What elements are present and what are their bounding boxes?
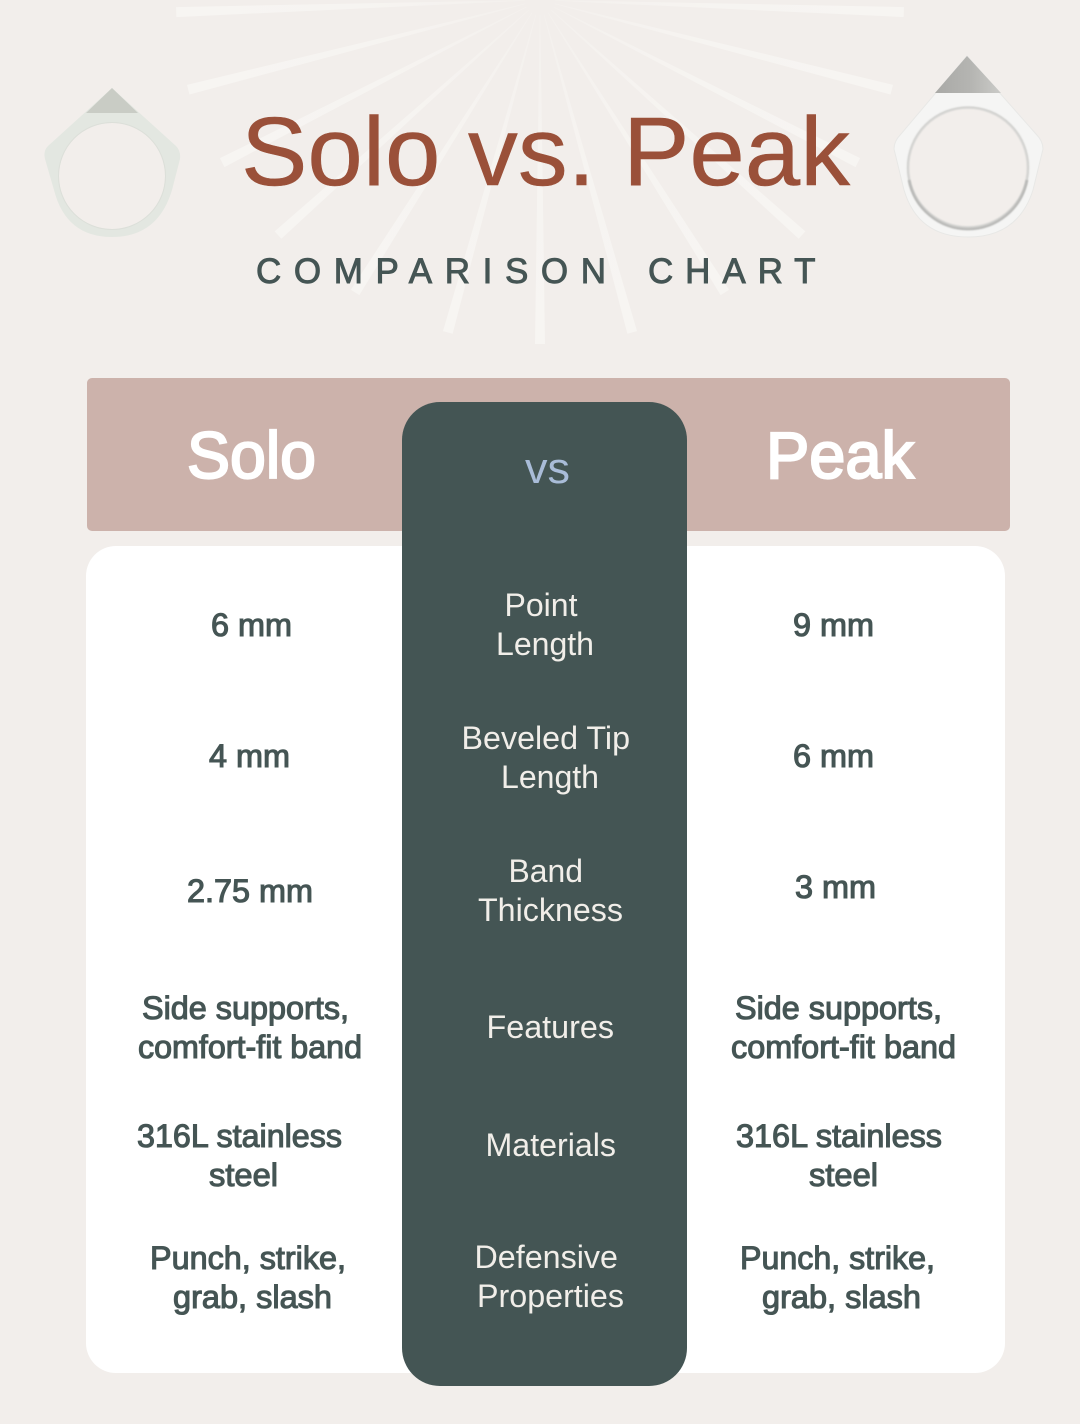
panel: header band bbox=[87, 378, 1010, 531]
column: Peak values: steel bbox=[809, 1157, 878, 1193]
column: Peak values: comfort-fit band bbox=[731, 1029, 956, 1065]
column: Peak values: 9 mm bbox=[793, 607, 874, 643]
column: attribute labels: Properties bbox=[477, 1278, 624, 1314]
column: attribute labels: Thickness bbox=[478, 892, 623, 928]
column: Solo values: 6 mm bbox=[211, 607, 292, 643]
column: attribute labels: Beveled Tip bbox=[462, 720, 630, 756]
column: Peak values: 316L stainless bbox=[736, 1118, 942, 1154]
column: Peak values bbox=[731, 607, 956, 1315]
column: Solo values: comfort-fit band bbox=[138, 1029, 362, 1065]
column: Solo values: 316L stainless bbox=[137, 1118, 342, 1154]
icon: Peak ring bbox=[894, 56, 1043, 237]
column: Peak values: Punch, strike, bbox=[740, 1240, 935, 1276]
column: Peak values: 6 mm bbox=[793, 738, 874, 774]
column: Peak values: Side supports, bbox=[735, 990, 942, 1026]
background sunburst rays bbox=[176, 0, 904, 344]
column: Solo values: grab, slash bbox=[173, 1279, 332, 1315]
heading: vs: vs bbox=[525, 444, 570, 493]
column: attribute labels: Length bbox=[501, 759, 599, 795]
column: attribute labels: Features bbox=[486, 1009, 614, 1045]
heading: Peak: Peak bbox=[766, 418, 915, 492]
column: Solo values bbox=[137, 607, 362, 1315]
column: Peak values: 3 mm bbox=[795, 869, 876, 905]
column: attribute labels: Defensive bbox=[474, 1239, 618, 1275]
title: Solo vs. Peak bbox=[241, 97, 851, 206]
panel: white table body bbox=[86, 546, 1005, 1373]
column: Peak values: grab, slash bbox=[762, 1279, 921, 1315]
column: Solo values: Punch, strike, bbox=[150, 1240, 346, 1276]
column: attribute labels: Length bbox=[496, 626, 594, 662]
subtitle: COMPARISON bbox=[256, 252, 619, 291]
heading: Solo: Solo bbox=[187, 418, 316, 492]
column: Solo values: 2.75 mm bbox=[187, 873, 313, 909]
subtitle: CHART bbox=[648, 252, 827, 291]
column: Solo values: 4 mm bbox=[209, 738, 290, 774]
column: Solo values: steel bbox=[209, 1157, 278, 1193]
icon: Solo ring bbox=[44, 88, 180, 237]
column: attribute labels: Band bbox=[508, 853, 583, 889]
column: attribute labels: Materials bbox=[486, 1127, 616, 1163]
column: attribute labels: Point bbox=[504, 587, 578, 623]
column: Solo values: Side supports, bbox=[142, 990, 349, 1026]
panel: centre attribute column bbox=[402, 402, 687, 1386]
column: attribute labels bbox=[462, 587, 630, 1314]
